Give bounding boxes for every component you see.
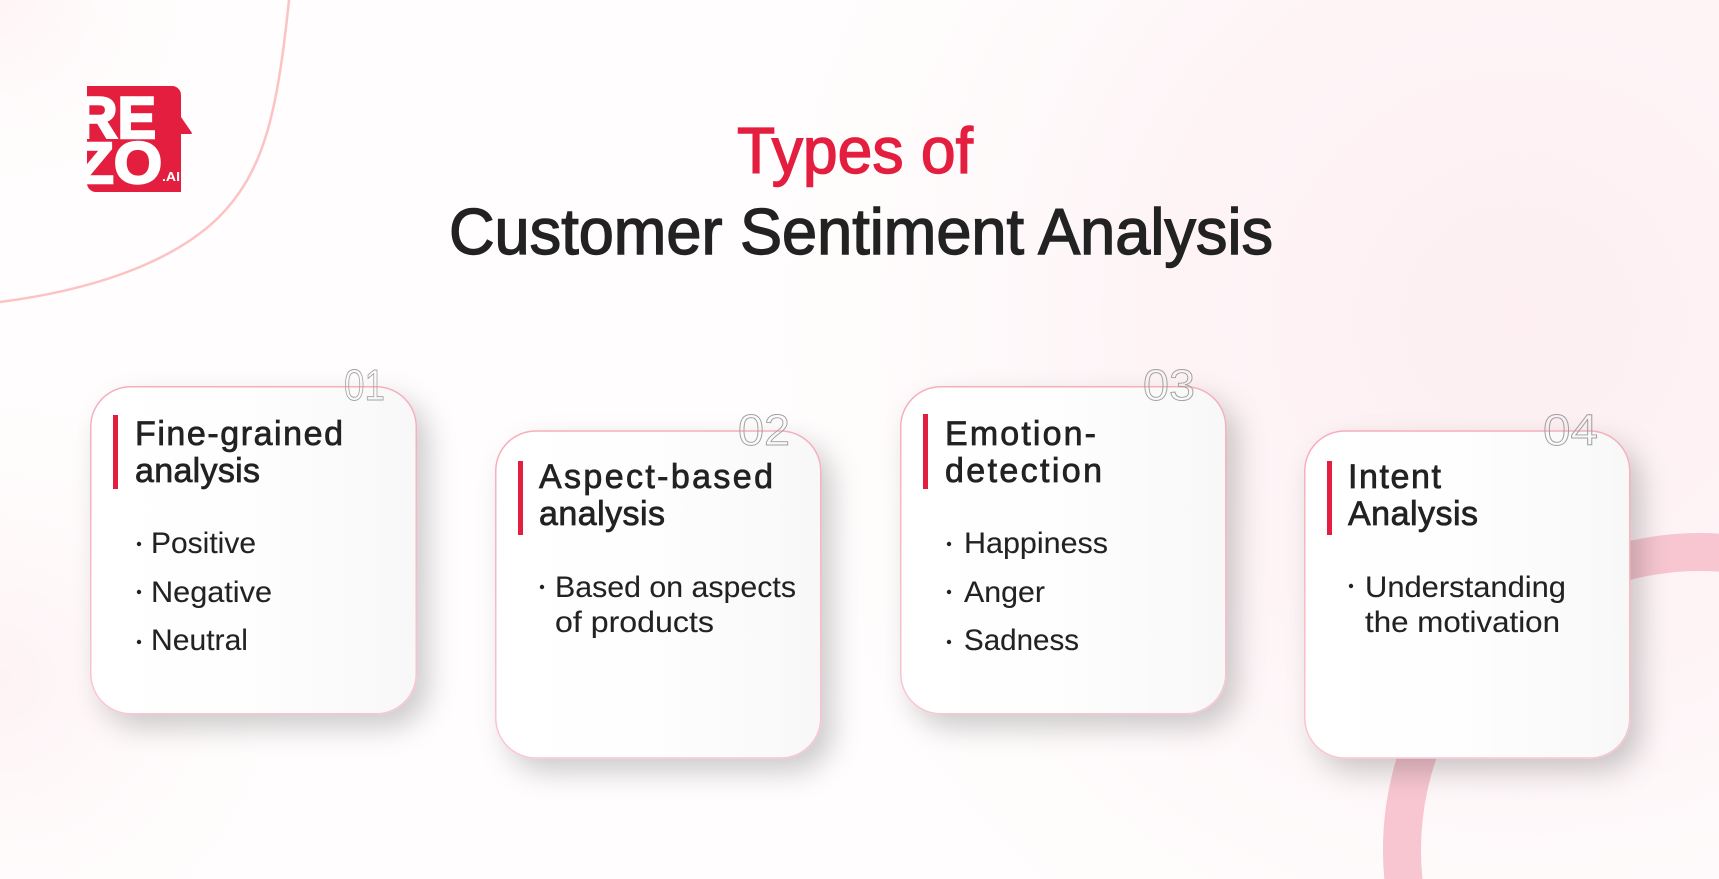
bullet list: Based on aspects xyxy=(555,571,796,604)
heading: Aspect-based xyxy=(539,458,773,496)
logo: ZO xyxy=(76,131,162,196)
number 04: 04 xyxy=(1543,406,1598,455)
number 02: 02 xyxy=(738,406,790,455)
accent bar xyxy=(113,415,118,489)
heading xyxy=(539,458,773,533)
bullet list: Happiness xyxy=(964,527,1108,560)
heading xyxy=(945,415,1102,490)
bullet list: of products xyxy=(555,606,714,639)
accent bar xyxy=(1327,461,1332,535)
logo xyxy=(87,86,192,192)
logo: RE xyxy=(76,86,156,151)
heading xyxy=(135,415,343,490)
bullet list: Understanding xyxy=(1365,571,1566,604)
bullet list xyxy=(947,527,1108,657)
heading: Emotion- xyxy=(945,415,1096,453)
title: Customer Sentiment Analysis xyxy=(449,195,1273,268)
title xyxy=(449,114,1273,268)
accent bar xyxy=(518,461,523,535)
bullet list xyxy=(1349,571,1566,639)
bullet list: Negative xyxy=(151,576,272,609)
heading: analysis xyxy=(135,452,260,490)
bullet list: Positive xyxy=(151,527,256,560)
number 03: 03 xyxy=(1143,361,1195,410)
heading: Analysis xyxy=(1348,495,1478,533)
logo: .AI xyxy=(162,169,180,184)
panel: intent analysis xyxy=(1305,406,1630,758)
heading: Intent xyxy=(1348,458,1442,496)
heading: detection xyxy=(945,452,1102,490)
ring arc bottom right xyxy=(1383,533,1719,879)
heading xyxy=(1348,458,1478,533)
bullet list: Sadness xyxy=(964,624,1079,657)
panel: aspect-based analysis xyxy=(496,406,821,758)
heading: analysis xyxy=(539,495,665,533)
bullet list xyxy=(137,527,272,657)
bullet list: Anger xyxy=(964,576,1045,609)
panel: emotion-detection xyxy=(901,361,1226,714)
bullet list: the motivation xyxy=(1365,606,1560,639)
panel: fine-grained analysis xyxy=(91,361,416,714)
number 01: 01 xyxy=(344,361,385,410)
title: Types of xyxy=(737,114,974,187)
accent bar xyxy=(923,414,928,489)
bullet list xyxy=(540,571,796,639)
bullet list: Neutral xyxy=(151,624,248,657)
heading: Fine-grained xyxy=(135,415,343,453)
curved line top left xyxy=(0,0,289,302)
